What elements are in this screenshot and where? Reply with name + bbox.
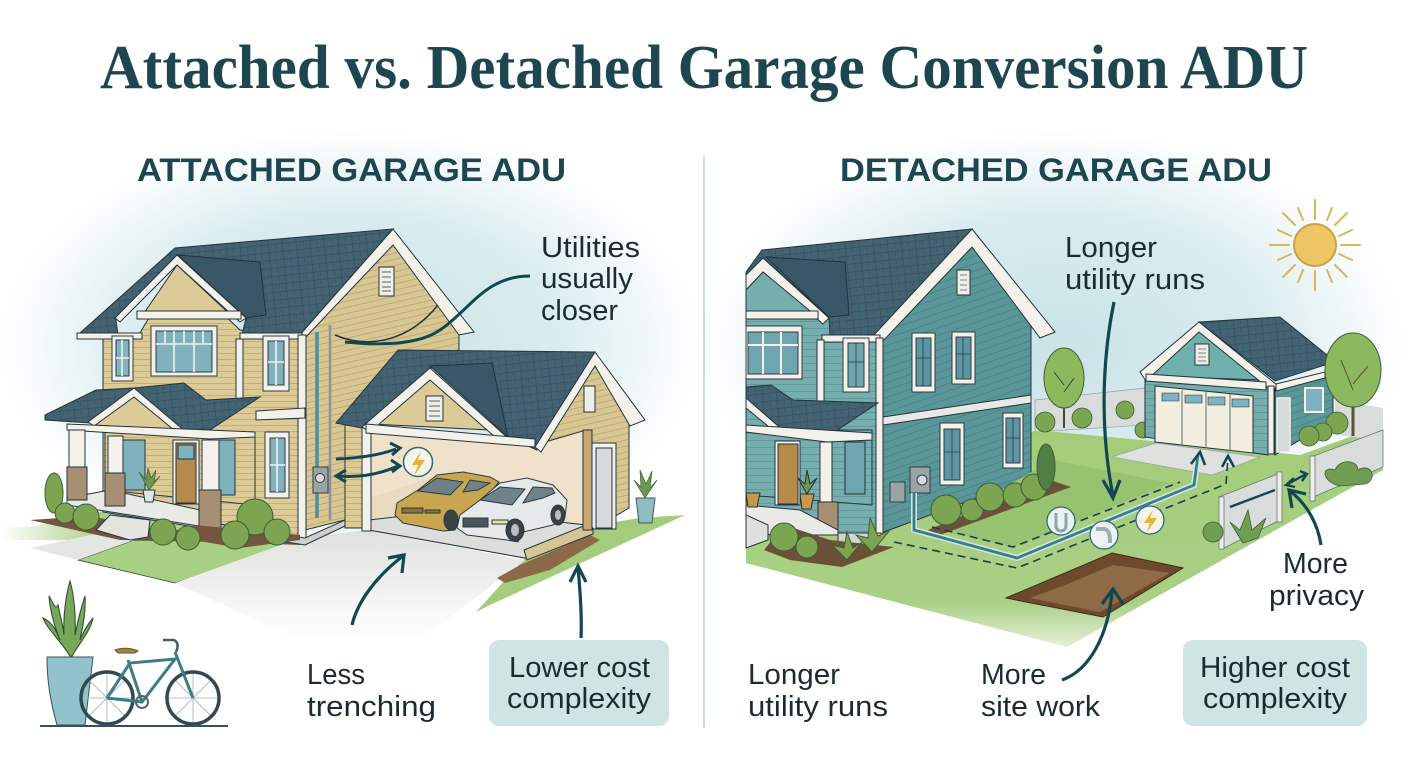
porch steps [96,515,150,540]
callout: utilities usually closer: Utilities [541,232,640,264]
tree left [1044,348,1084,428]
vent [379,267,394,296]
callout: utilities usually closer [345,232,640,344]
front wall [746,318,881,533]
privacy fence [1219,430,1383,549]
icon: bicycle [40,640,228,726]
callout: less trenching: Less [307,659,365,691]
interior [369,430,586,558]
tree right [1325,333,1381,436]
porch [45,383,260,540]
callout: less trenching: trenching [307,691,436,723]
right plant pot [634,470,657,523]
side wall [305,240,459,530]
dormer [430,363,508,437]
car: gold [395,472,499,531]
vent [1195,344,1209,365]
curb [524,525,593,560]
beds and shrubs [764,444,1170,567]
label: longer utility runs bottom: utility runs [748,691,888,723]
roof trim [298,229,474,338]
centre gable [140,265,235,319]
roof [1199,317,1327,381]
icon: lightning badge with arrows [336,443,432,482]
front wall [103,270,305,538]
callout: lower cost complexity: Lower cost [509,652,650,684]
callout: higher cost complexity: Higher cost [1200,652,1350,684]
meters [890,467,930,502]
ground: lawn [746,425,1383,647]
callout: more site work: More [981,659,1046,691]
shrubs [45,473,300,550]
sky wash right [705,130,1405,560]
icon: sun [1270,200,1360,290]
dormer roof [178,255,266,318]
side door [592,443,616,529]
panel: attached garage scene [0,229,685,640]
callout: less trenching [307,555,436,723]
porch roof [45,383,260,432]
side wall [881,240,1031,533]
utility lines and meter [313,305,438,520]
band [883,395,1031,425]
porch plants [746,493,760,507]
label: longer utility runs bottom [748,659,888,723]
columns [69,430,85,468]
heading: detached: DETACHED GARAGE ADU [840,152,1272,188]
garage walls [1144,380,1268,456]
roof [746,229,972,335]
callout: lower cost complexity: complexity [507,683,652,715]
roof [336,350,595,450]
floor [369,510,586,558]
side door [1277,398,1290,452]
callout: utilities usually closer: closer [541,295,618,327]
sky wash left [0,130,700,560]
callout: more privacy: privacy [1269,580,1365,612]
divider [703,155,705,728]
back shrubs [1035,401,1151,438]
title: Attached vs. Detached Garage Conversion ADU [100,34,1308,102]
callout: more privacy: More [1283,548,1348,580]
callout: longer utility runs top: Longer [1065,232,1157,264]
vent [957,270,970,295]
callout: more site work [981,589,1123,723]
label: longer utility runs bottom: Longer [748,659,840,691]
garage vent [426,396,443,421]
pit [1006,553,1183,617]
main house, teal [746,229,1055,534]
callout: longer utility runs top [1065,232,1205,498]
post [362,425,371,531]
main house [77,229,474,545]
detached garage [1140,317,1333,455]
gable [372,376,490,430]
car: white [457,478,567,542]
porch plant [139,468,160,490]
ground: lawn and driveway [0,505,685,640]
callout: higher cost complexity [1183,640,1367,726]
callout: lower cost complexity [489,566,669,726]
driveway [1112,443,1260,475]
garage [336,350,645,560]
callout: higher cost complexity: complexity [1203,683,1348,715]
back fence [1035,388,1383,440]
fence arrows [1230,471,1307,507]
callout: longer utility runs top: utility runs [1065,264,1205,296]
icons: utilities badges [1047,506,1164,549]
foundation [103,505,345,545]
panel: detached garage scene [746,229,1383,647]
windows teal house [746,326,1023,485]
side wall [539,357,640,530]
callout: utilities usually closer: usually [541,263,633,295]
garage door [1155,386,1253,453]
side window [1305,388,1323,412]
heading: attached: ATTACHED GARAGE ADU [137,152,566,188]
front door [173,440,199,504]
main roof [80,229,393,337]
fence plants [1203,462,1372,543]
porch teal house [746,385,881,553]
callout: more site work: site work [981,691,1101,723]
callout: more privacy [1269,490,1365,612]
garage shrubs [1299,412,1348,446]
windows [112,326,289,498]
utility trench lines [894,452,1234,568]
icon: potted plant [43,581,93,725]
